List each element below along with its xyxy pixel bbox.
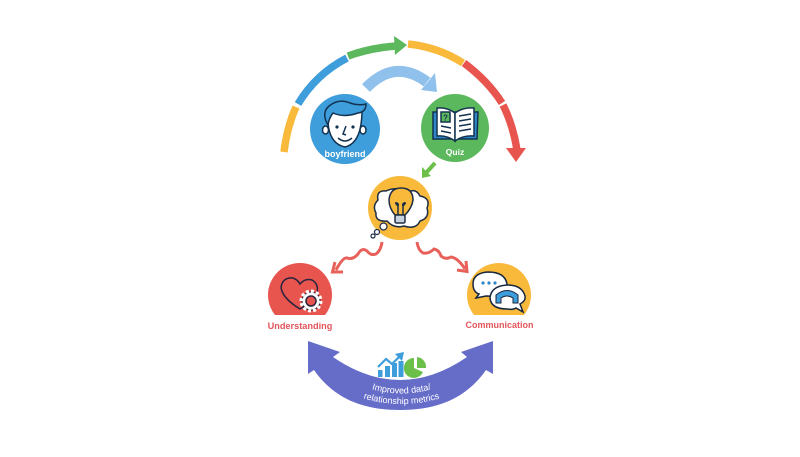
infographic [268,36,533,410]
arc: red [464,63,502,103]
icon: heart and gear [281,278,321,311]
label: boyfriend: boyfriend [324,149,366,159]
label: communication: Communication [465,320,534,330]
node: idea [368,176,432,240]
arc: green [348,46,396,56]
node: quiz [421,94,489,162]
arc: blue [298,58,347,104]
icon: pie chart [404,357,426,378]
arc: red lower [503,105,517,150]
arrow: red wavy right [417,242,467,272]
icon: question mark: ? [443,114,448,122]
arrowhead: green [394,36,407,55]
icon: face [322,101,366,147]
icon: thought cloud [374,189,428,227]
arrow: purple curved double [308,341,493,410]
arrow: green down [422,163,435,178]
label: quiz: Quiz [446,147,464,157]
label: improved data: Improved data/ [372,382,430,394]
icon: light bulb [389,188,413,223]
node: understanding [268,263,332,331]
arrow: light blue [366,71,437,92]
arc: yellow start [284,107,296,152]
node: boyfriend [310,94,380,164]
node: communication [465,263,534,330]
arc: yellow second [408,44,463,63]
arrow: red wavy left [332,242,382,272]
top cycle arc [284,36,526,162]
icon: speech bubbles [473,272,525,312]
icon: bar chart with arrow [378,352,404,377]
label: understanding: Understanding [268,321,332,331]
icon: open book [433,108,478,141]
arrowhead: red [506,148,526,162]
label: relationship metrics: relationship metrics [364,394,440,406]
